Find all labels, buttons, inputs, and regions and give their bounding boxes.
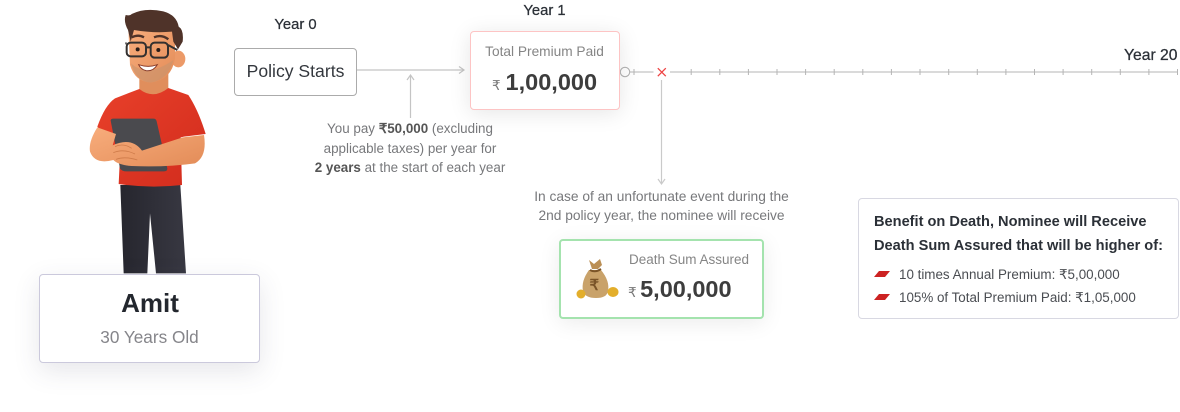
text: premium note: applicable taxes) per year for — [324, 140, 496, 156]
year timeline axis — [630, 69, 1178, 75]
icon: money bag: ₹ — [590, 277, 600, 294]
benefit heading: Death Sum Assured that will be higher of: — [874, 238, 1163, 254]
text: nominee note: 2nd policy year, the nominee will receive — [538, 208, 785, 222]
arrow: down to nominee text — [658, 80, 665, 184]
premium label: Total Premium Paid — [485, 44, 604, 59]
icon: money bag — [576, 259, 618, 298]
premium amount: ₹1,00,000 — [492, 69, 597, 95]
timeline start circle — [620, 67, 630, 77]
name: Amit — [121, 288, 179, 318]
red t-shirt — [97, 88, 206, 187]
box: policy starts — [234, 48, 357, 96]
fingers — [113, 145, 137, 160]
ear — [171, 51, 185, 67]
character: Amit — [90, 10, 206, 274]
text: nominee note: In case of an unfortunate event during the — [534, 189, 789, 204]
card: death sum assured — [559, 239, 764, 319]
benefit heading — [874, 214, 1163, 254]
head — [128, 28, 175, 83]
age: 30 Years Old — [100, 327, 199, 347]
smile — [139, 65, 157, 71]
red cross marker — [658, 68, 666, 76]
benefit item 1: 10 times Annual Premium: ₹5,00,000 — [899, 267, 1120, 282]
beard shade — [131, 60, 173, 83]
eyes — [136, 47, 160, 52]
legs — [120, 185, 186, 273]
neck — [139, 72, 168, 96]
tablet — [111, 119, 167, 171]
policy starts text: Policy Starts — [247, 61, 344, 81]
card: Amit — [39, 274, 260, 363]
text: nominee note — [534, 189, 789, 223]
text: premium note — [315, 121, 506, 175]
sum amount: ₹5,00,000 — [628, 276, 732, 302]
label: year 0: Year 0 — [274, 16, 317, 32]
glasses — [125, 43, 177, 58]
text: premium note: 2 years at the start of each year — [315, 160, 505, 175]
text: premium note: You pay ₹50,000 (excluding — [327, 121, 493, 136]
benefit heading: Benefit on Death, Nominee will Receive — [874, 214, 1146, 230]
arrow: policy start to year 1 — [357, 66, 464, 74]
label: year 1: Year 1 — [523, 3, 566, 19]
hair — [125, 10, 183, 49]
eyebrows — [132, 36, 168, 39]
arrow: premium note up — [407, 75, 414, 118]
card: total premium paid — [470, 31, 620, 110]
sum label: Death Sum Assured — [629, 252, 749, 267]
benefit item 2: 105% of Total Premium Paid: ₹1,05,000 — [899, 290, 1136, 305]
card: benefit on death — [858, 198, 1179, 319]
label: year 20: Year 20 — [1124, 46, 1178, 64]
arms and hands — [90, 127, 205, 166]
